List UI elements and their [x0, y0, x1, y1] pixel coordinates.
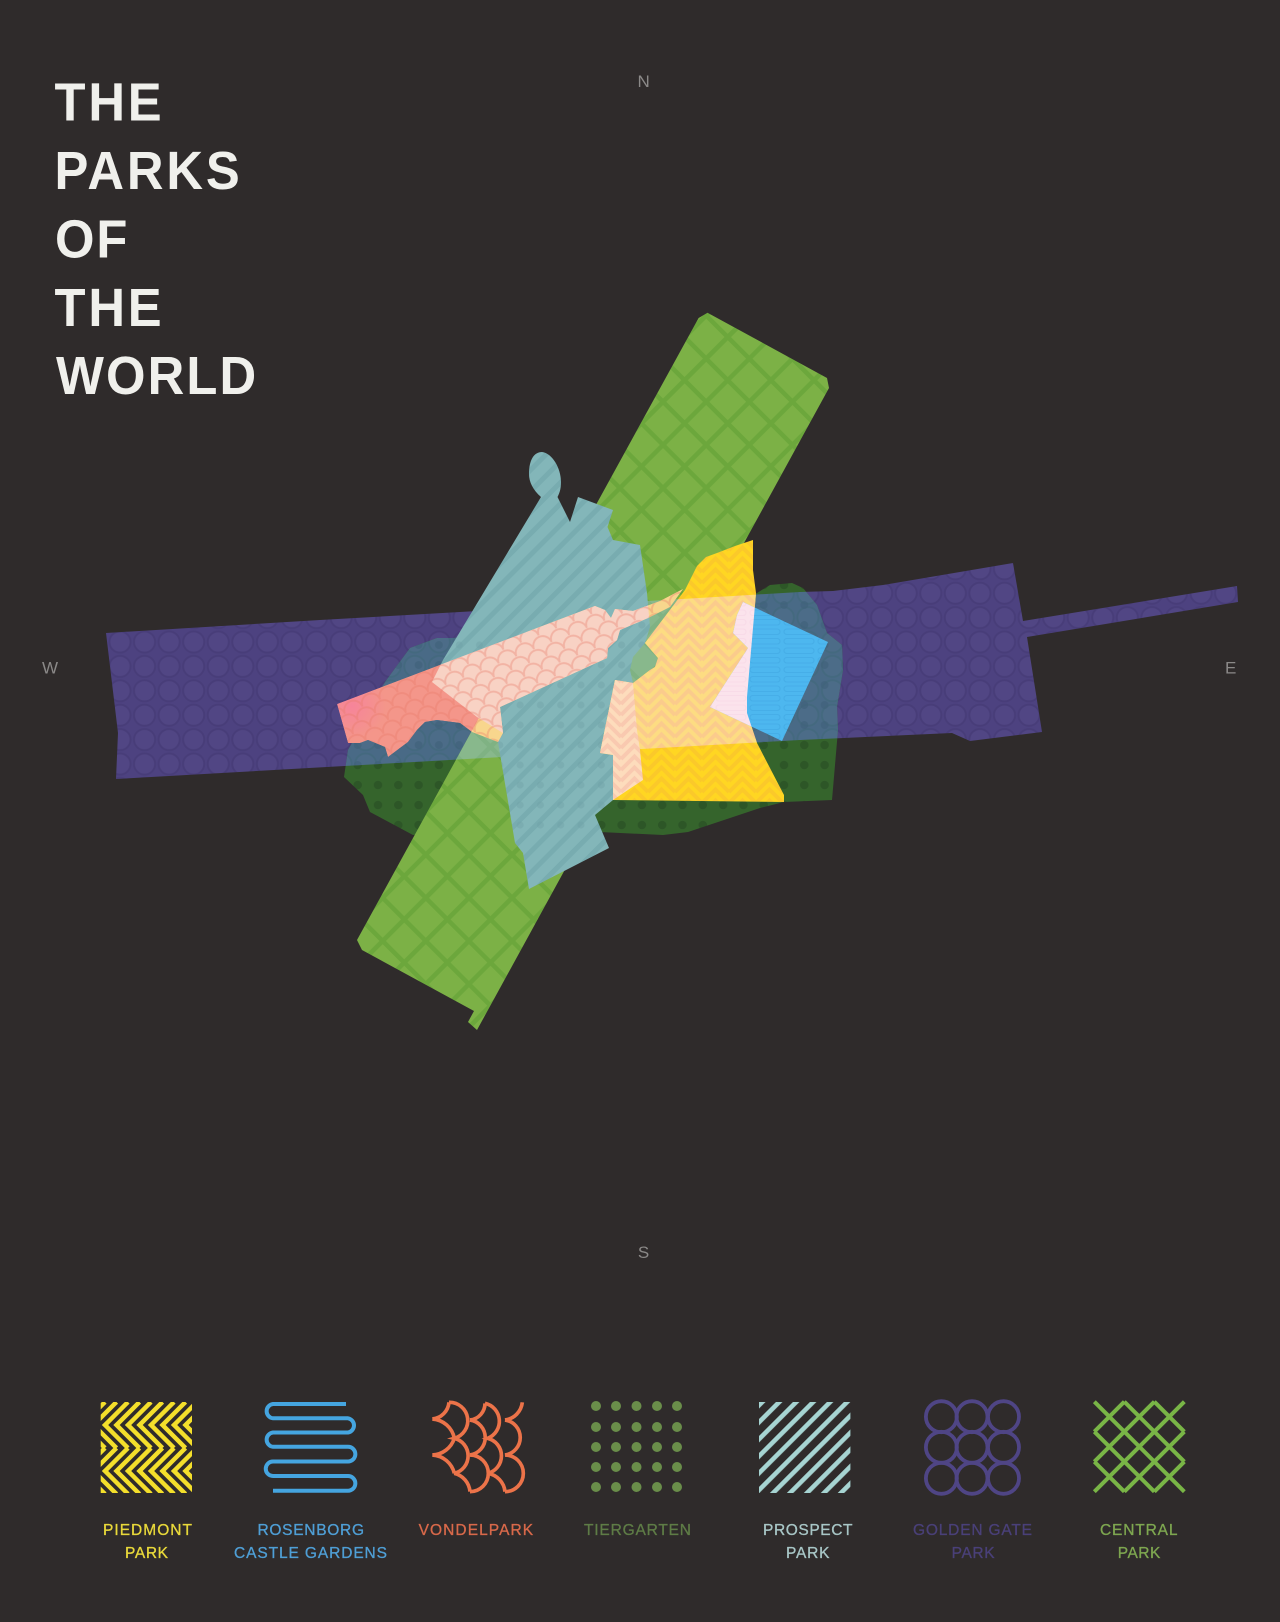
park: Prospect Park	[432, 452, 650, 889]
park: Golden Gate Park	[106, 563, 1238, 779]
compass labels	[42, 72, 1236, 1262]
label: PIEDMONT	[103, 1522, 193, 1539]
legend item: Piedmont Park	[101, 1402, 193, 1562]
title: OF	[55, 210, 127, 270]
label: ROSENBORG	[258, 1522, 364, 1539]
park: Tiergarten	[344, 583, 843, 835]
overlap: Piedmont Park and Prospect Park	[600, 680, 643, 800]
park: Vondelpark	[337, 589, 683, 757]
icon: fish scales	[432, 1402, 523, 1492]
label: PARK	[125, 1545, 169, 1562]
label: CASTLE GARDENS	[234, 1545, 387, 1562]
label	[1100, 1522, 1178, 1562]
icon: circle grid	[926, 1401, 1019, 1494]
label: GOLDEN GATE	[913, 1522, 1032, 1539]
label	[913, 1522, 1032, 1562]
icon: dot grid	[591, 1401, 682, 1492]
label: VONDELPARK	[419, 1522, 534, 1539]
compass labels: N	[637, 72, 650, 91]
compass labels: S	[638, 1243, 649, 1262]
legend item: Central Park	[1094, 1402, 1184, 1562]
label: PROSPECT	[763, 1522, 853, 1539]
label	[234, 1522, 387, 1562]
icon: diamond lattice	[1094, 1402, 1184, 1492]
title: WORLD	[56, 347, 256, 406]
title: PARKS	[54, 142, 240, 201]
label: PARK	[1118, 1545, 1161, 1562]
legend item: Prospect Park	[759, 1402, 853, 1562]
legend item: Rosenborg Castle Gardens	[234, 1404, 387, 1562]
legend item: Golden Gate Park	[913, 1401, 1032, 1562]
park: Central Park	[357, 313, 829, 1030]
park: Rosenborg Castle Gardens	[710, 602, 828, 741]
overlap: Piedmont Park and Golden Gate	[600, 594, 757, 752]
legend item: Tiergarten	[584, 1401, 691, 1539]
icon: chevrons	[101, 1402, 192, 1493]
label: TIERGARTEN	[584, 1522, 691, 1539]
label: PARK	[786, 1545, 830, 1562]
legend	[101, 1401, 1184, 1562]
label	[103, 1522, 193, 1562]
icon: serpentine line	[266, 1404, 355, 1491]
icon: diagonal stripes	[759, 1402, 850, 1493]
overlap: Prospect Park and Tiergarten dots	[456, 622, 645, 828]
overlap: Tiergarten and Golden Gate	[346, 592, 843, 766]
overlap: Central Park and Golden Gate	[456, 599, 678, 760]
title: THE	[54, 73, 162, 133]
compass labels: E	[1225, 658, 1236, 678]
title	[54, 73, 256, 406]
label	[763, 1522, 853, 1562]
overlap: Rosenborg and Piedmont Park	[710, 602, 755, 726]
label: CENTRAL	[1100, 1522, 1178, 1539]
title: THE	[54, 279, 162, 338]
legend item: Vondelpark	[419, 1402, 534, 1539]
label: PARK	[952, 1545, 995, 1562]
park: Piedmont Park	[600, 540, 784, 802]
compass labels: W	[42, 658, 58, 678]
overlaid park map	[106, 313, 1238, 1030]
